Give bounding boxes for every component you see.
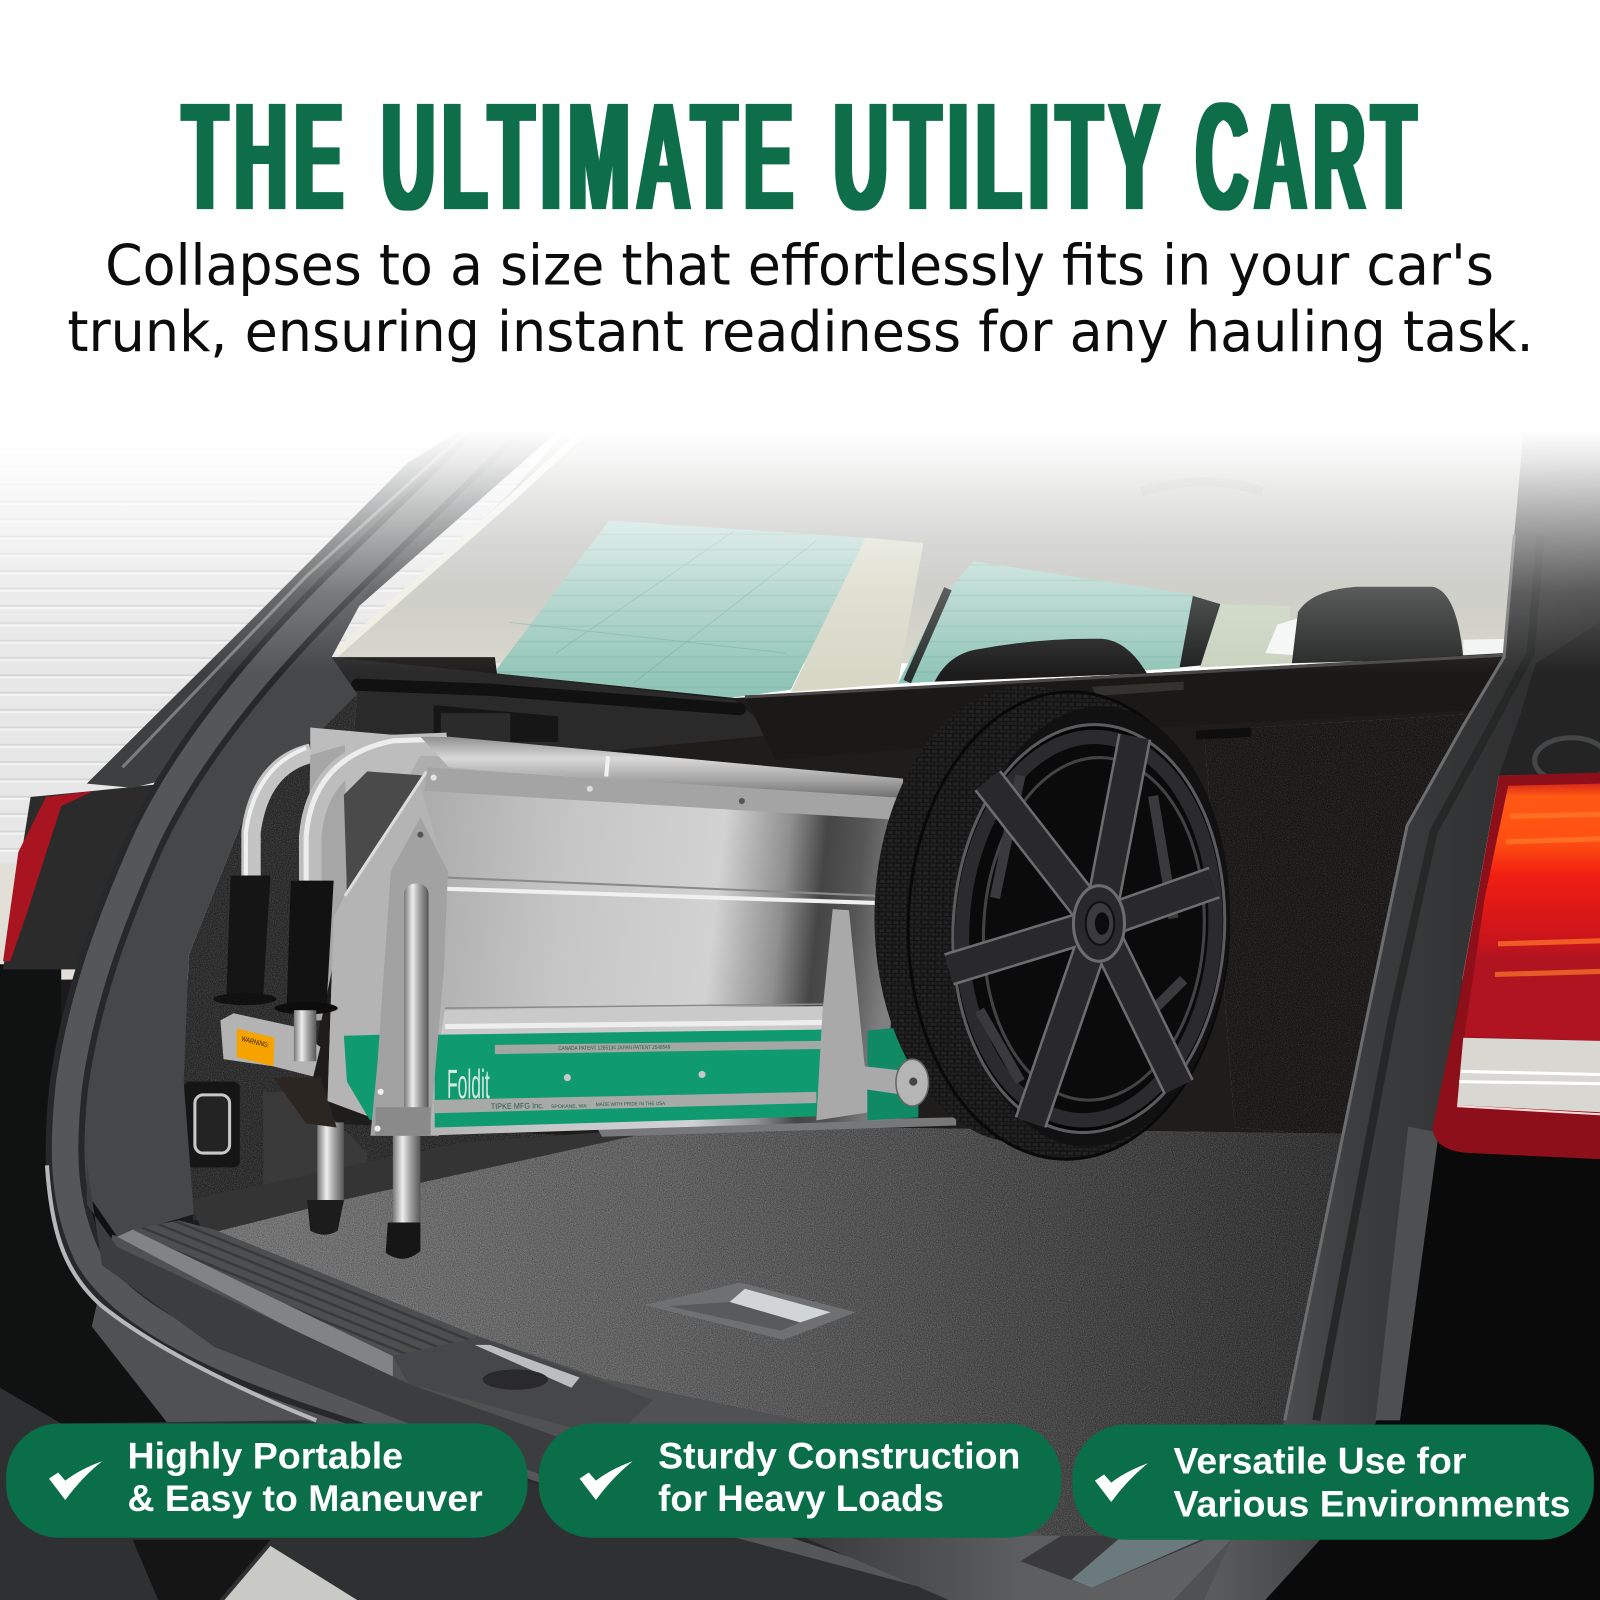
ground [224, 1546, 357, 1600]
garage wall background [0, 419, 531, 986]
pride text: MADE WITH PRIDE IN THE USA [596, 1101, 666, 1108]
flap strip [424, 767, 903, 819]
under-cart bar [595, 1117, 956, 1137]
right door pillar [1204, 419, 1600, 1600]
headrests [935, 587, 1463, 682]
lower sill base [92, 1235, 1286, 1600]
title: THE [183, 71, 350, 242]
lower side pocket [263, 1092, 367, 1196]
parcel shelf [745, 653, 1505, 760]
white top fade [0, 403, 1600, 673]
wheels [871, 683, 1241, 1162]
small patent text: CANADA PATENT 1285134 JAPAN PATENT 2549549 [558, 1045, 670, 1052]
carpet floor [204, 1127, 1342, 1571]
feature pill: versatile [1072, 1424, 1594, 1540]
ribbed trunk sill [87, 1163, 653, 1510]
green label band: Foldit [447, 1061, 490, 1107]
icon: check [1095, 1463, 1148, 1502]
feature pill: portable: Highly Portable [128, 1435, 403, 1476]
see-through parts [980, 776, 1184, 1082]
lower wall band [189, 1128, 673, 1235]
chrome bumper trim [47, 1165, 316, 1420]
left interior side panel [184, 694, 612, 1220]
bottom sill right [800, 1536, 1235, 1600]
dark base under car [0, 980, 1600, 1600]
panel side face [328, 786, 447, 1136]
rear handle tube [251, 753, 311, 884]
feature pill: versatile: Various Environments [1173, 1483, 1570, 1524]
roof handle [1141, 482, 1263, 492]
left plate column [306, 745, 347, 1020]
door trim panel [61, 515, 408, 1237]
feature pill: sturdy: for Heavy Loads [658, 1478, 944, 1519]
photo: car trunk scene [0, 403, 1600, 1600]
dark bracket under latch [273, 1078, 337, 1128]
headliner ceiling [332, 419, 1531, 663]
spokes [949, 737, 1214, 1122]
subtitle [67, 234, 1534, 365]
bumper dark area [0, 1388, 969, 1600]
rear tire [871, 683, 1176, 1145]
front handle tube [310, 744, 447, 884]
door rubber seal [65, 429, 939, 1600]
trunk interior back wall [189, 655, 1505, 1224]
feature pill: sturdy: Sturdy Construction [658, 1435, 1020, 1476]
front tire [904, 689, 1233, 1162]
right back wall carpet [1204, 714, 1469, 1138]
right tail light [1433, 772, 1600, 1159]
rim [943, 718, 1235, 1139]
right lower body [1265, 1127, 1600, 1600]
green behind wheel [867, 1026, 918, 1120]
rear window left [492, 520, 865, 698]
subtitle: Collapses to a size that effortlessly fits in your car's [105, 234, 1494, 299]
floor handle recess [645, 1283, 856, 1340]
title: ULTIMATE [382, 71, 800, 242]
foldable cart [213, 728, 956, 1259]
subtitle: trunk, ensuring instant readiness for any hauling task. [67, 300, 1534, 365]
cart legs [307, 1122, 420, 1259]
title: UTILITY [834, 71, 1166, 242]
hand grips [213, 876, 338, 1014]
axle knob [855, 1059, 929, 1106]
centre bracket [370, 817, 448, 1136]
cabin small panel and front window [1200, 604, 1509, 667]
rear tyre [133, 1540, 270, 1600]
feature pill: portable [6, 1423, 528, 1538]
hub [1073, 886, 1124, 961]
green label band [344, 1030, 822, 1128]
location text: SPOKANE, WA [551, 1104, 587, 1110]
side lashing ring [184, 1082, 240, 1167]
feature pill: portable: & Easy to Maneuver [128, 1478, 483, 1519]
top rail [420, 737, 903, 798]
icon: check [580, 1461, 633, 1500]
rear side window [898, 561, 1220, 684]
feature pill: versatile: Versatile Use for [1173, 1440, 1466, 1481]
dark diagonal flap [344, 771, 424, 891]
maker text: TIPKE MFG Inc. [491, 1101, 544, 1111]
warning sticker: WARNING: [240, 1035, 270, 1050]
feature pill: sturdy [539, 1423, 1061, 1538]
rear frame plate [310, 728, 449, 802]
upper left shelf area [306, 657, 776, 776]
latch block [220, 1010, 320, 1077]
icon: check [49, 1461, 102, 1500]
right bracket [816, 909, 869, 1120]
cart main panel [328, 755, 903, 1136]
title [183, 71, 1422, 242]
panel ridge highlights [441, 878, 880, 1035]
beige panel between windows [791, 538, 923, 692]
car body left exterior [0, 419, 571, 1600]
tire sidewall [947, 699, 1241, 1154]
